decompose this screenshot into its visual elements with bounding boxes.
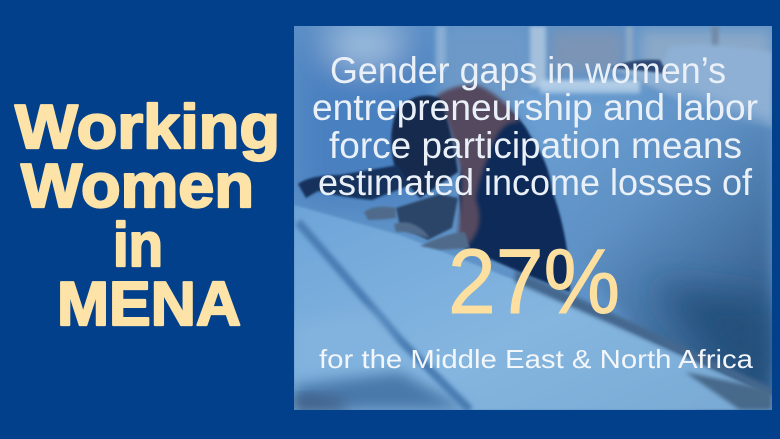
photo: hands	[364, 207, 470, 250]
title: Working Women in MENA: Working	[15, 93, 280, 162]
photo: red headscarf	[436, 85, 520, 245]
photo: room base	[294, 26, 772, 410]
panel text: region: for the Middle East & North Africa	[319, 344, 754, 374]
title: Working Women in MENA: in	[113, 211, 163, 280]
photo: woman in red headscarf, body	[458, 100, 570, 292]
photo: right wall	[515, 95, 772, 410]
key figure: 27%: 27%	[448, 231, 620, 333]
photo: lower-left shadow	[294, 372, 470, 410]
photo: light fold patch	[368, 307, 396, 339]
title: Working Women in MENA: MENA	[57, 270, 241, 339]
photo: lower-right corner	[685, 372, 772, 410]
title: Working Women in MENA: Women	[21, 152, 254, 221]
panel text: intro statement: Gender gaps in women’s	[330, 50, 726, 91]
title: Working Women in MENA	[15, 93, 280, 339]
photo: table fold line	[298, 222, 470, 410]
panel text: intro statement	[312, 50, 758, 203]
photo: window frame	[436, 26, 718, 94]
photo: reaching arm	[298, 165, 410, 200]
photo: back wall and window	[440, 26, 772, 106]
photo: woman in dark headscarf	[391, 96, 458, 198]
panel text: intro statement: entrepreneurship and labor	[312, 87, 758, 128]
panel text: intro statement: force participation means	[329, 125, 742, 166]
panel: photo of women working with fabric	[294, 25, 772, 410]
photo: table cloth	[294, 205, 772, 410]
photo: left wall with highlight	[294, 25, 434, 206]
photo: patterned sleeve	[396, 194, 458, 240]
panel text: intro statement: estimated income losses of	[318, 162, 753, 203]
photo: folded fabric on shelf	[612, 45, 772, 128]
photo: table edge shadow	[515, 270, 772, 396]
